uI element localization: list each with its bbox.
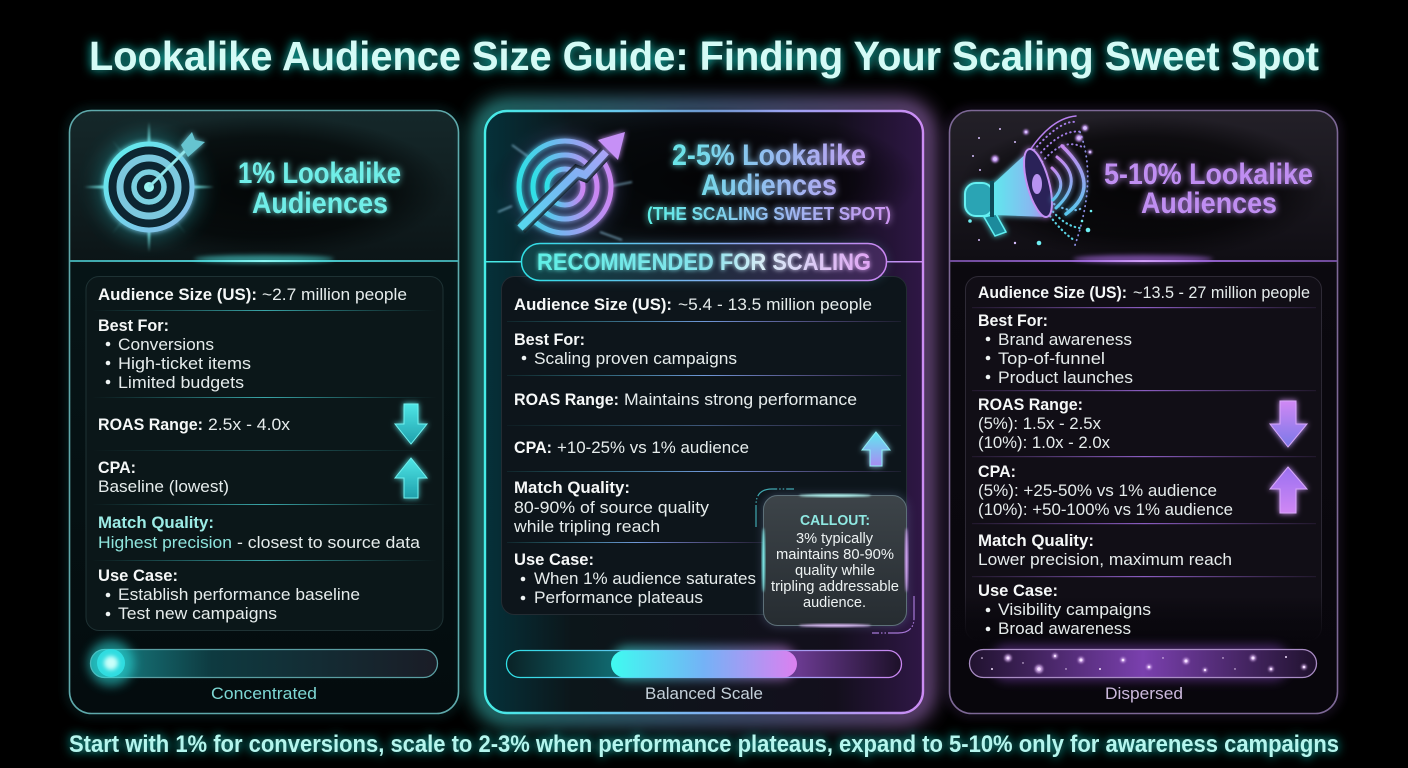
roas range: 2.5x - 4.0x [208, 415, 291, 434]
cpa: (5%): +25-50% vs 1% audience [978, 481, 1217, 500]
use case [514, 550, 756, 607]
use case [978, 581, 1151, 638]
best for [98, 316, 251, 392]
details box [966, 276, 1322, 640]
meter: balanced scale [506, 646, 902, 680]
roas range [98, 415, 291, 434]
use case: Use Case: [978, 581, 1058, 600]
icon: down arrow [1270, 401, 1307, 447]
match quality: Match Quality: [978, 531, 1094, 550]
cpa: Baseline (lowest) [98, 477, 229, 496]
match quality: - closest to source data [237, 533, 421, 552]
icon: megaphone [965, 116, 1092, 248]
match quality: while tripling reach [513, 517, 660, 536]
icon: down arrow [395, 404, 427, 444]
badge: recommended for scaling: RECOMMENDED FOR SCALING [537, 249, 871, 276]
roas range: Maintains strong performance [624, 390, 857, 409]
heading: 1% lookalike audiences: 1% Lookalike [238, 157, 401, 190]
heading: 2-5% lookalike audiences: (THE SCALING SWEET SPOT) [647, 203, 891, 224]
badge: recommended for scaling [521, 243, 887, 281]
roas range: ROAS Range: [978, 395, 1083, 414]
best for: Best For: [514, 330, 585, 349]
callout: tripling addressable [771, 578, 899, 595]
use case [98, 566, 360, 623]
meter label: Concentrated [211, 684, 317, 703]
audience size [514, 295, 872, 314]
details box [502, 276, 906, 614]
best for: Scaling proven campaigns [534, 349, 737, 368]
best for [978, 311, 1133, 387]
heading: 1% lookalike audiences [238, 157, 401, 220]
cpa: CPA: [514, 438, 552, 457]
match quality [513, 478, 710, 536]
roas range [514, 390, 857, 409]
cpa: CPA: [98, 458, 136, 477]
match quality: Highest precision [98, 533, 232, 552]
heading: 5-10% lookalike audiences: 5-10% Lookalike [1104, 158, 1313, 191]
audience size: Audience Size (US): [98, 285, 257, 304]
roas range: (10%): 1.0x - 2.0x [978, 433, 1110, 452]
use case: Test new campaigns [118, 604, 277, 623]
meter label: Balanced Scale [645, 684, 763, 703]
icon: up arrow [395, 458, 427, 498]
audience size: ~2.7 million people [262, 285, 407, 304]
callout: maintains 80-90% [776, 546, 894, 563]
heading: 1% lookalike audiences: Audiences [252, 187, 388, 220]
meter: dispersed [970, 645, 1316, 681]
match quality: Match Quality: [98, 513, 214, 532]
match quality [978, 531, 1232, 569]
callout: audience. [803, 594, 866, 611]
meter label: Dispersed [1105, 684, 1183, 703]
roas range [978, 395, 1110, 452]
cpa: +10-25% vs 1% audience [557, 438, 749, 457]
callout: quality while [795, 562, 875, 579]
icon: up arrow [1270, 467, 1307, 513]
icon: up arrow [862, 432, 890, 466]
best for: Product launches [998, 368, 1133, 387]
best for: Limited budgets [118, 373, 244, 392]
cpa: CPA: [978, 462, 1016, 481]
details box [86, 276, 443, 630]
match quality [98, 513, 421, 552]
best for: Best For: [98, 316, 169, 335]
use case: Broad awareness [998, 619, 1131, 638]
heading: 2-5% lookalike audiences: Audiences [701, 169, 837, 202]
use case: Use Case: [514, 550, 594, 569]
callout: 3% typically [796, 530, 873, 547]
panel: 5-10% lookalike [949, 110, 1338, 714]
audience size: ~13.5 - 27 million people [1133, 283, 1310, 302]
best for: Conversions [118, 335, 214, 354]
best for: Top-of-funnel [998, 349, 1105, 368]
best for: Best For: [978, 311, 1048, 330]
cpa [978, 462, 1233, 519]
title: Lookalike Audience Size Guide: Finding Your Scaling Sweet Spot [89, 33, 1319, 79]
roas range: ROAS Range: [98, 415, 203, 434]
callout: CALLOUT: [800, 513, 870, 529]
heading: 2-5% lookalike audiences [647, 139, 891, 224]
best for: Brand awareness [998, 330, 1132, 349]
cpa [98, 458, 229, 496]
audience size: ~5.4 - 13.5 million people [678, 295, 872, 314]
panel: 2-5% lookalike [482, 106, 926, 716]
callout [756, 489, 914, 633]
best for: High-ticket items [118, 354, 251, 373]
use case: Use Case: [98, 566, 178, 585]
use case: Establish performance baseline [118, 585, 360, 604]
match quality: 80-90% of source quality [514, 498, 710, 517]
cpa: (10%): +50-100% vs 1% audience [978, 500, 1233, 519]
meter: concentrated [88, 640, 438, 686]
roas range: (5%): 1.5x - 2.5x [978, 414, 1101, 433]
use case: Performance plateaus [534, 588, 703, 607]
best for [514, 330, 737, 368]
heading: 5-10% lookalike audiences: Audiences [1141, 187, 1277, 220]
audience size [98, 285, 407, 304]
icon: target with arrow [84, 122, 214, 252]
match quality: Match Quality: [514, 478, 630, 497]
heading: 5-10% lookalike audiences [1104, 158, 1313, 220]
use case: Visibility campaigns [998, 600, 1151, 619]
panel: 1% lookalike [69, 110, 459, 714]
use case: When 1% audience saturates [534, 569, 756, 588]
audience size: Audience Size (US): [978, 283, 1127, 302]
match quality: Lower precision, maximum reach [978, 550, 1232, 569]
heading: 2-5% lookalike audiences: 2-5% Lookalike [672, 139, 866, 172]
roas range: ROAS Range: [514, 390, 619, 409]
audience size: Audience Size (US): [514, 295, 672, 314]
icon: target with rising arrow [498, 132, 632, 240]
audience size [978, 283, 1310, 302]
